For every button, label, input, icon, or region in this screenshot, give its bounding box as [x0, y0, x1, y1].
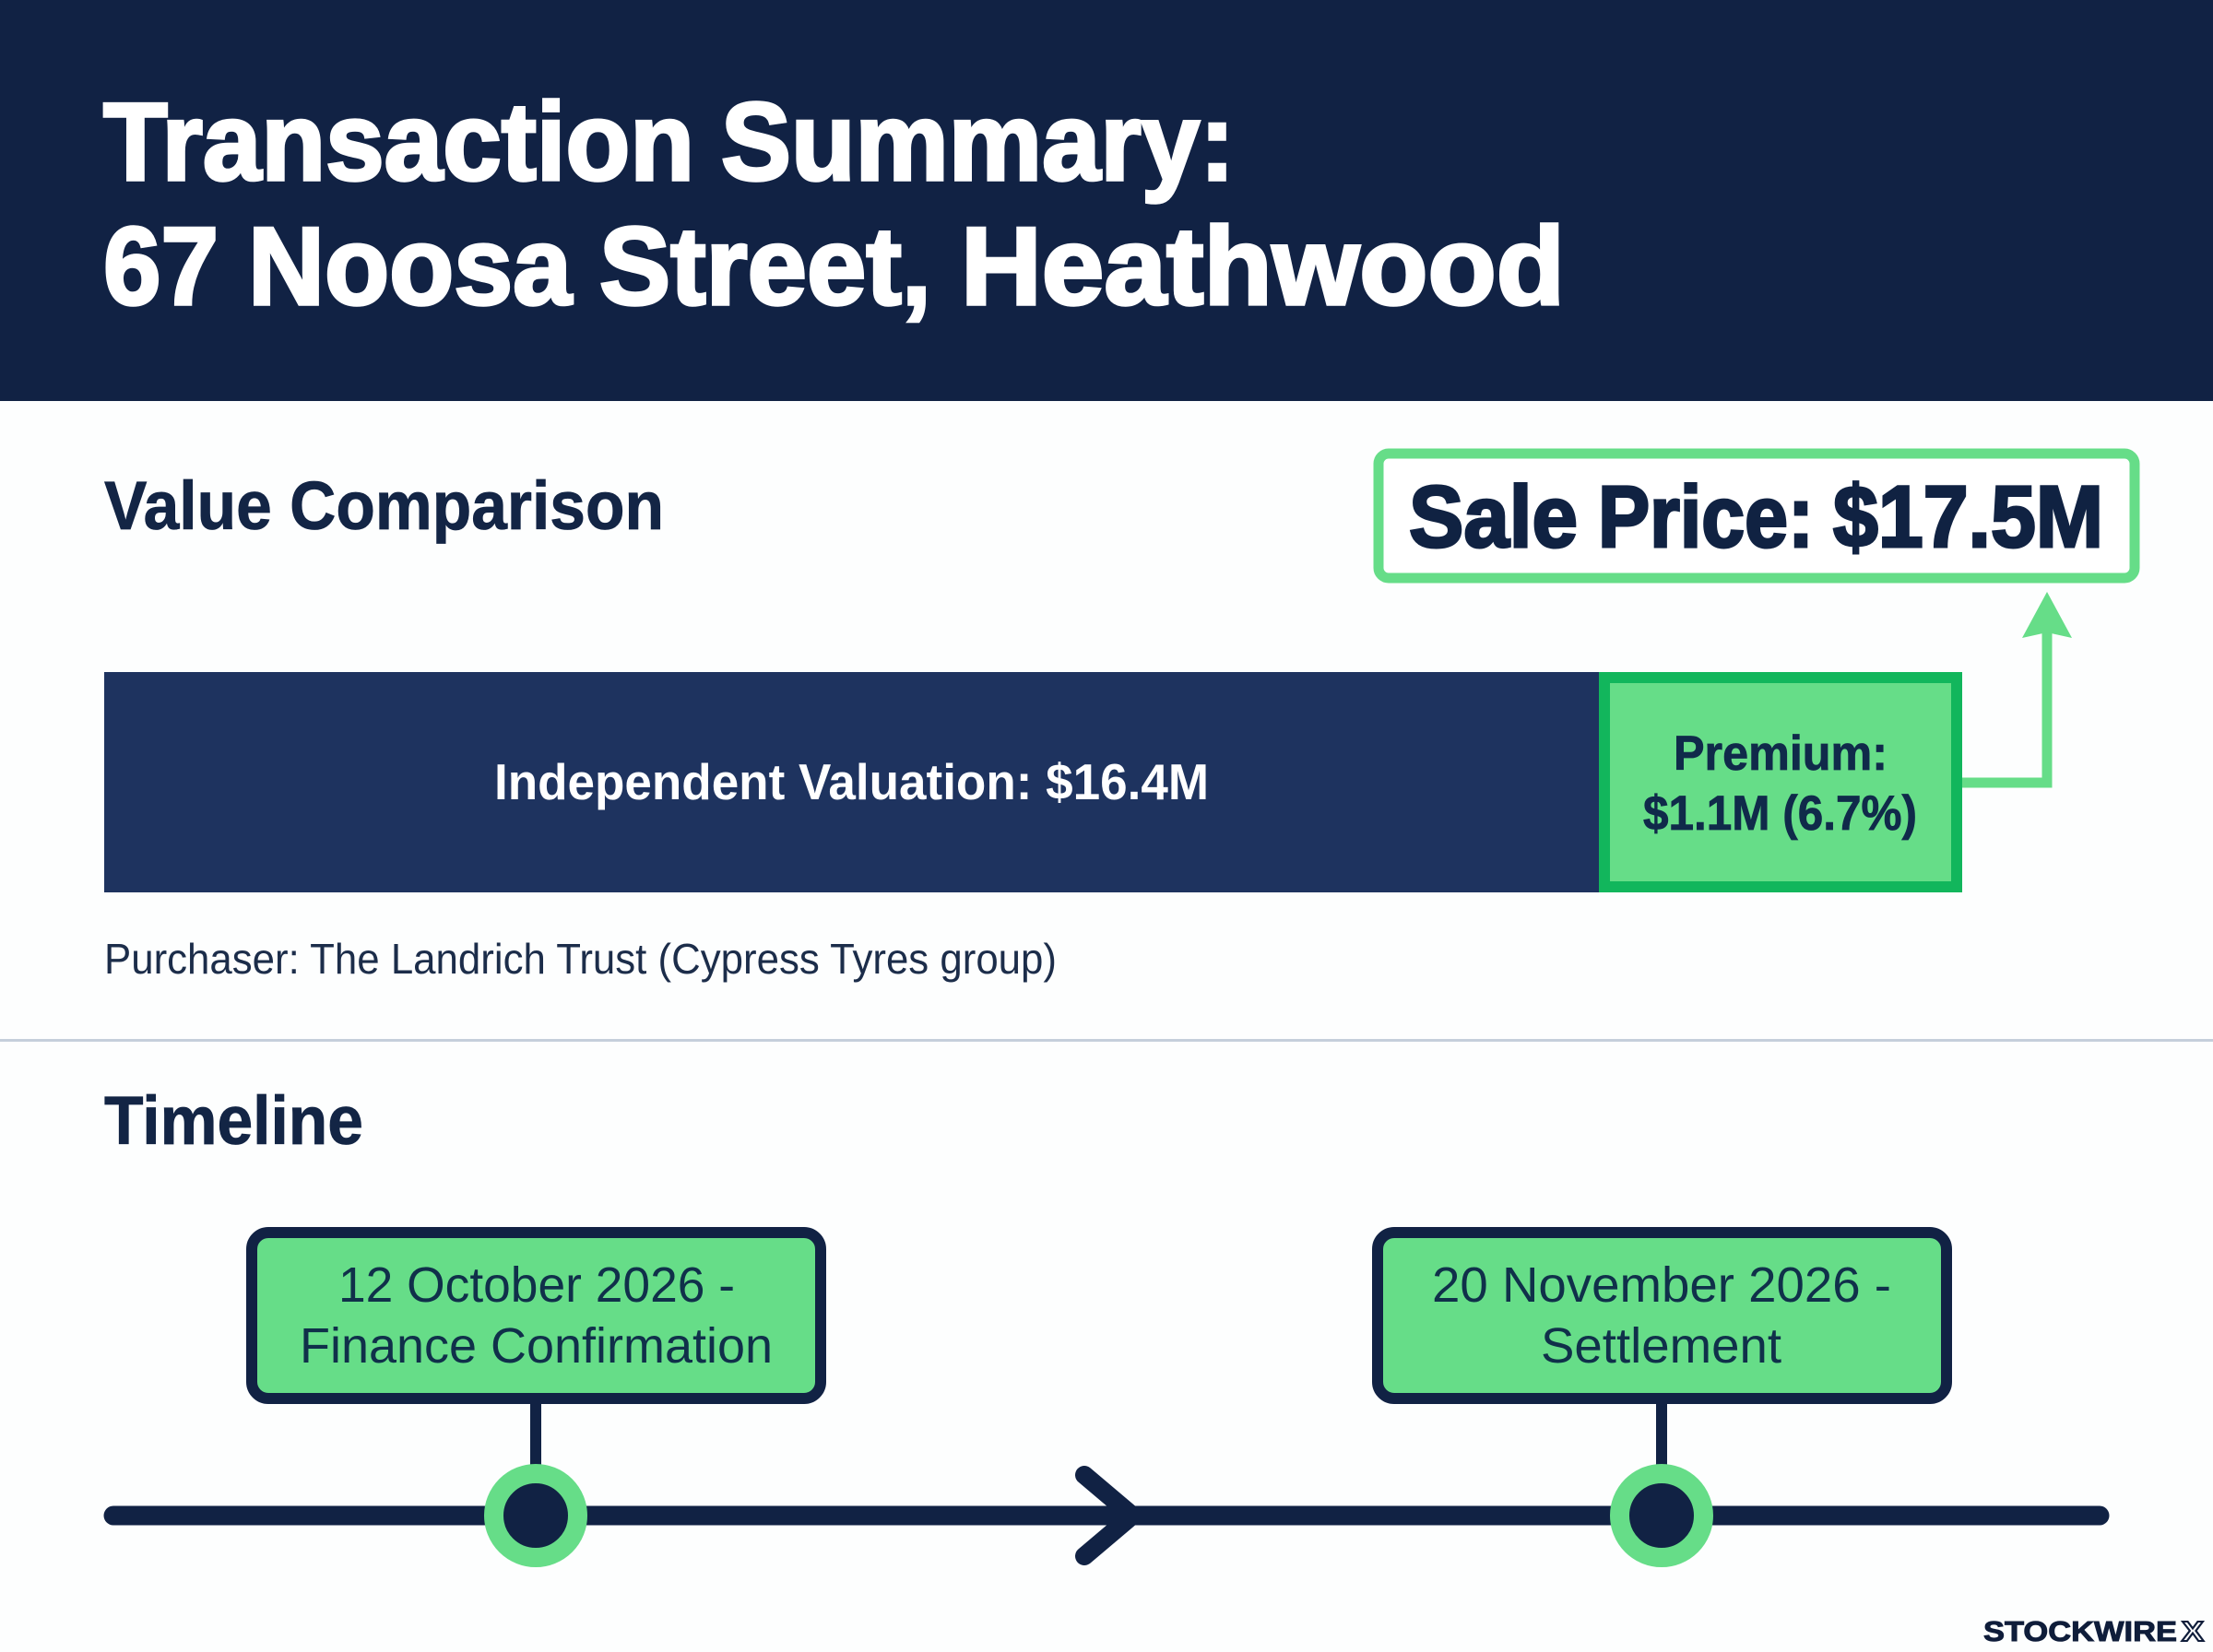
arrow: premium to sale price — [1962, 592, 2072, 783]
milestone: settlement — [1378, 1233, 1947, 1558]
title: Summary: — [721, 80, 1235, 204]
title: Transaction — [103, 80, 694, 204]
milestone: settlement: 20 November 2026 - — [1432, 1257, 1891, 1313]
heading: timeline: Timeline — [104, 1082, 363, 1159]
milestone: finance confirmation: 12 October 2026 - — [338, 1257, 735, 1313]
milestone: finance confirmation: Finance Confirmation — [300, 1318, 773, 1374]
milestone: finance confirmation — [252, 1233, 821, 1558]
bar: independent valuation — [104, 672, 1599, 892]
title: Heathwood — [961, 205, 1565, 328]
callout: sale price: $17.5M — [1833, 468, 2103, 566]
callout: sale price — [1379, 454, 2135, 578]
header band — [0, 0, 2213, 401]
callout: sale price: Price: — [1598, 468, 1814, 566]
title: Street, — [599, 205, 931, 328]
title — [103, 80, 1565, 328]
bar: independent valuation: Independent Valuation: $16.4M — [494, 753, 1209, 810]
title: Noosa — [248, 205, 573, 328]
title: 67 — [103, 205, 219, 328]
brand logo: X — [2182, 1615, 2204, 1647]
milestone: settlement: Settlement — [1541, 1318, 1781, 1374]
timeline axis with arrow — [113, 1475, 2100, 1556]
bar: premium: $1.1M (6.7%) — [1643, 786, 1917, 841]
callout: sale price: Sale — [1409, 468, 1578, 566]
purchaser note: Purchaser: The Landrich Trust (Cypress Tyres group) — [104, 935, 1057, 983]
bar: premium: Premium: — [1674, 726, 1888, 781]
heading: value comparison: Value Comparison — [104, 467, 664, 544]
bar: premium — [1604, 678, 1957, 887]
brand logo: STOCKWIRE — [1983, 1615, 2177, 1647]
